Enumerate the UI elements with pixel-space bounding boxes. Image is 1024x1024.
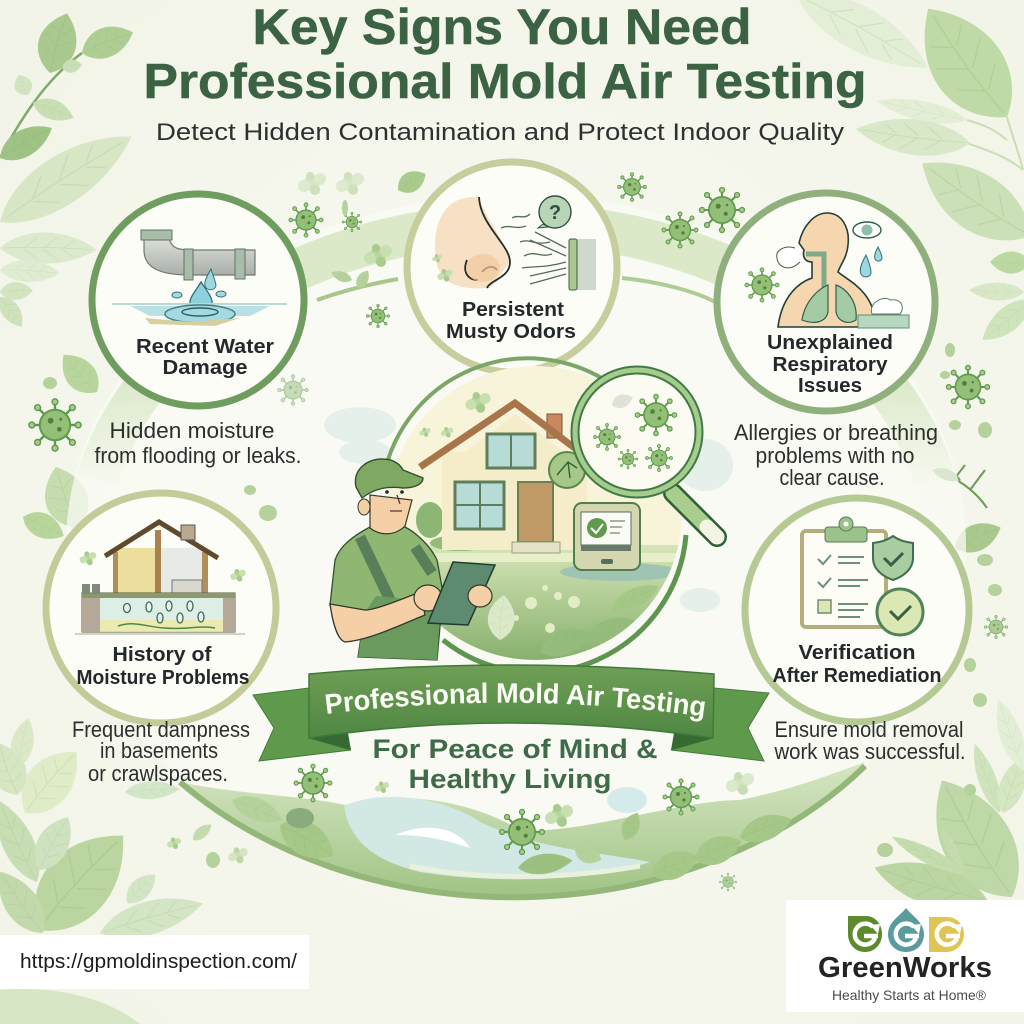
ribbon banner	[252, 664, 770, 762]
description: allergies: clear cause.	[780, 465, 884, 490]
label: unexplained respiratory issues	[767, 332, 893, 397]
label: history of moisture problems: Moisture Problems	[76, 667, 250, 689]
description: dampness	[72, 717, 250, 786]
central house scene	[330, 358, 717, 673]
label: unexplained respiratory issues: Respiratory	[772, 354, 888, 376]
icon: person with lungs	[745, 213, 909, 328]
logo: GreenWorks	[786, 900, 1024, 1012]
house	[420, 403, 587, 553]
technician	[330, 459, 495, 660]
tagline: Healthy Living	[408, 764, 612, 794]
description: dampness: or crawlspaces.	[88, 761, 228, 786]
label: recent water damage: Recent Water	[136, 336, 274, 358]
magnifying glass	[575, 370, 717, 537]
title: Professional Mold Air Testing	[144, 55, 866, 109]
tagline	[372, 734, 658, 794]
panel: recent water damage	[92, 194, 304, 406]
label: recent water damage	[136, 336, 274, 379]
tagline: For Peace of Mind &	[372, 734, 658, 764]
description: hidden moisture	[94, 418, 302, 468]
description: allergies: Allergies or breathing	[734, 420, 938, 445]
bottom-left leaves	[0, 716, 207, 1024]
label: unexplained respiratory issues: Unexplained	[767, 332, 893, 354]
title	[144, 0, 866, 109]
ribbon banner: Professional Mold Air Testing	[326, 682, 705, 722]
bottom-right leaves	[869, 696, 1024, 920]
panel: verification after remediation	[745, 498, 969, 722]
logo: GreenWorks: GreenWorks	[818, 952, 992, 984]
description: ensure removal: Ensure mold removal	[774, 717, 964, 742]
panel: persistent musty odors	[407, 162, 617, 372]
label: unexplained respiratory issues: Issues	[798, 375, 862, 397]
label: verification after remediation	[772, 642, 942, 687]
label: persistent musty odors: Musty Odors	[446, 321, 576, 343]
description: allergies	[734, 420, 938, 490]
website url box	[0, 935, 309, 989]
description: ensure removal: work was successful.	[774, 739, 966, 764]
icon: clipboard checklist	[802, 517, 923, 635]
label: history of moisture problems	[76, 644, 250, 689]
description: hidden moisture: from flooding or leaks.	[94, 443, 302, 468]
bottom band with water and vine	[180, 762, 865, 897]
label: persistent musty odors	[446, 299, 576, 343]
icon: nose and odor vent	[432, 196, 596, 290]
top-right leaves	[787, 0, 1024, 350]
description: hidden moisture: Hidden moisture	[110, 418, 274, 443]
icon: nose and odor vent: ?	[549, 202, 561, 224]
label: verification after remediation: Verification	[798, 642, 916, 664]
description: allergies: problems with no	[756, 443, 914, 468]
icon: leaking pipe	[112, 230, 287, 326]
description: dampness: in basements	[100, 738, 218, 763]
label: history of moisture problems: History of	[112, 644, 212, 666]
scattered mold spores and viruses	[29, 165, 1008, 891]
label: verification after remediation: After Remediation	[772, 665, 942, 687]
website url box: https://gpmoldinspection.com/	[20, 950, 297, 973]
description: dampness: Frequent dampness	[72, 717, 250, 742]
pale left leaves	[0, 115, 144, 332]
mid-side leaves	[18, 345, 1006, 560]
title: Key Signs You Need	[252, 0, 752, 55]
subtitle: Detect Hidden Contamination and Protect Indoor Quality	[156, 119, 844, 146]
logo marks	[848, 908, 964, 952]
description: ensure removal	[774, 717, 966, 764]
top-left branch	[0, 8, 138, 169]
panel: history of moisture problems	[46, 493, 276, 723]
logo: GreenWorks: Healthy Starts at Home®	[832, 987, 987, 1003]
device: air tester	[574, 503, 640, 570]
label: recent water damage: Damage	[162, 357, 248, 379]
label: persistent musty odors: Persistent	[462, 299, 564, 321]
panel: unexplained respiratory issues	[717, 193, 935, 411]
icon: house cross-section	[75, 522, 246, 634]
central swirl backdrop	[66, 195, 966, 897]
